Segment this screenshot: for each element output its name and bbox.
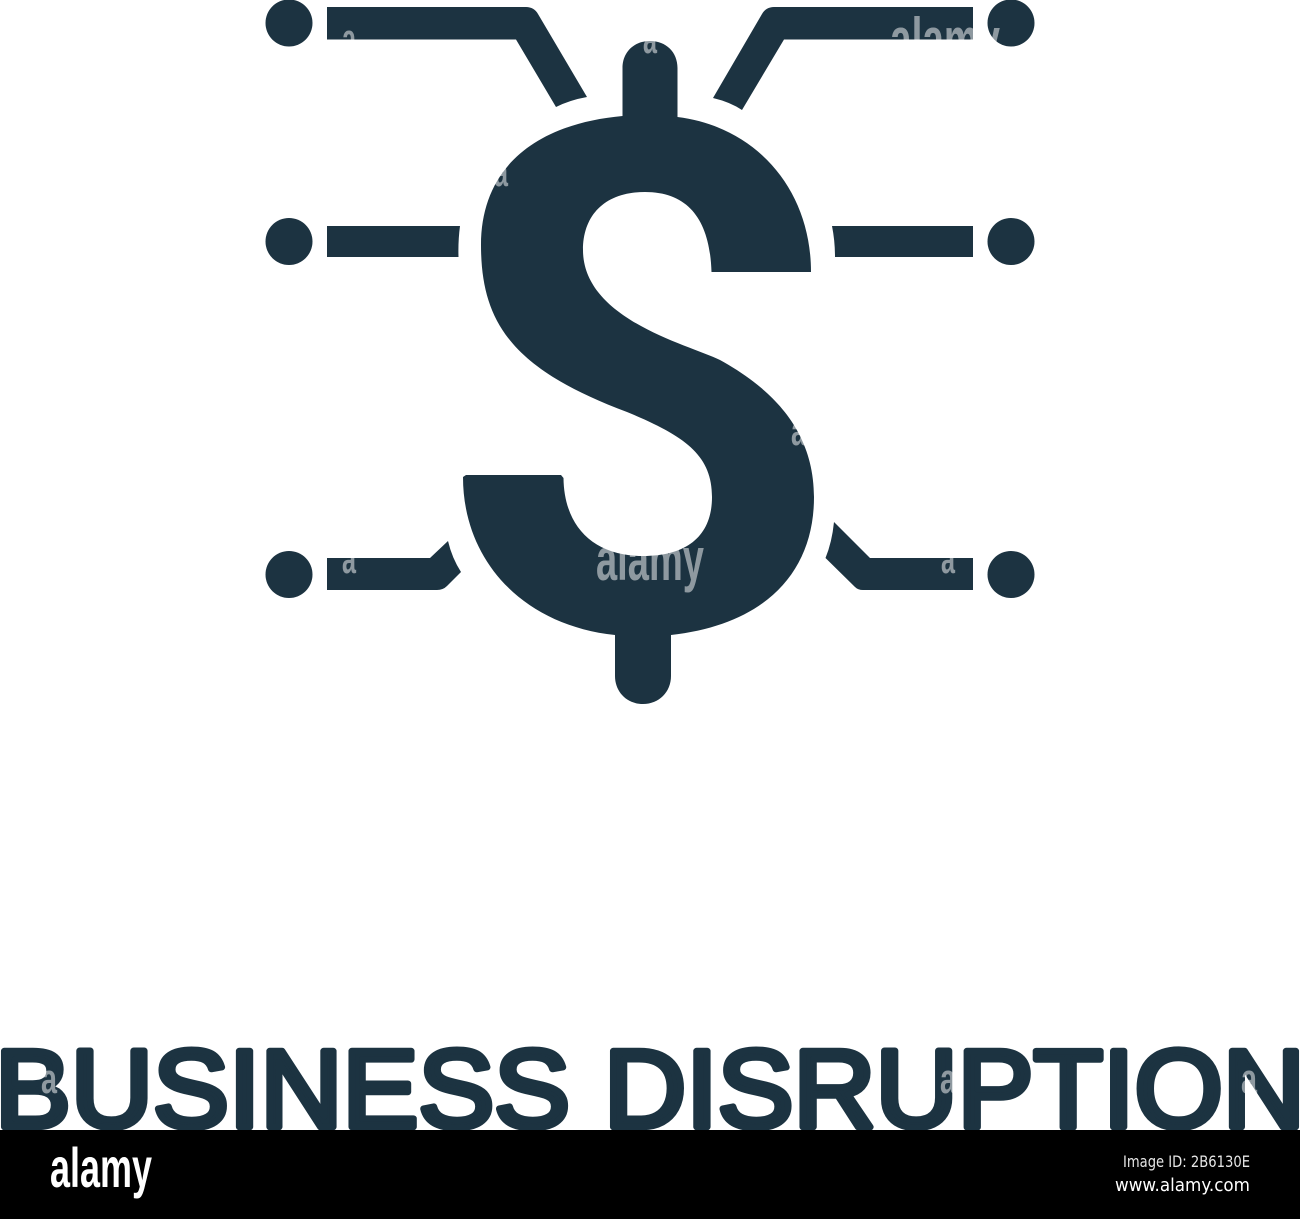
title: BUSINESS [0, 1028, 570, 1151]
node: bottom left [266, 551, 312, 598]
icon: dollar sign with circuit connectors [266, 0, 1034, 704]
connector: top right [713, 7, 973, 110]
watermark: letter marks: a [342, 15, 356, 62]
watermark: letter marks: a [791, 407, 806, 454]
watermark: letter marks: a [41, 1055, 57, 1102]
connector: middle left [327, 226, 460, 257]
watermark: center: alamy [596, 526, 704, 593]
node: bottom right [988, 551, 1034, 598]
watermark: letter marks: a [940, 1055, 956, 1102]
watermark: letter marks: a [643, 15, 657, 62]
watermark: letter marks: a [941, 535, 955, 582]
icon: dollar sign [463, 41, 814, 704]
connector: bottom left [327, 541, 461, 590]
node: top left [266, 0, 312, 46]
footer background [0, 1130, 1300, 1219]
watermark: letter marks: a [1241, 1055, 1257, 1102]
footer url: www.alamy.com [1115, 1175, 1250, 1196]
footer band [0, 1130, 1300, 1219]
node: middle left [266, 218, 312, 265]
connector: middle right [832, 226, 973, 257]
watermark: letter marks: a [342, 535, 356, 582]
watermark: letter marks: a [494, 148, 508, 195]
watermark: top right: alamy [890, 6, 1000, 73]
node: top right [988, 0, 1034, 46]
footer logo: alamy [50, 1136, 152, 1199]
title: DISRUPTION [604, 1028, 1300, 1151]
connector: top left [327, 7, 587, 107]
footer image id: Image ID: 2B6130E [1123, 1152, 1250, 1171]
title [0, 1028, 1300, 1151]
node: middle right [988, 218, 1034, 265]
connector: bottom right [826, 522, 973, 590]
